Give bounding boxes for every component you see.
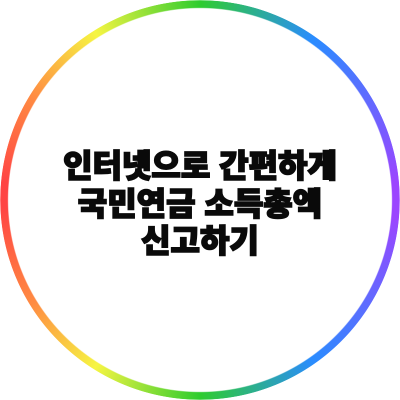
title: [63, 148, 337, 259]
title: 국민연금 소득총액: [78, 186, 322, 222]
title: 신고하기: [141, 223, 259, 259]
title: 인터넷으로 간편하게: [63, 148, 337, 184]
